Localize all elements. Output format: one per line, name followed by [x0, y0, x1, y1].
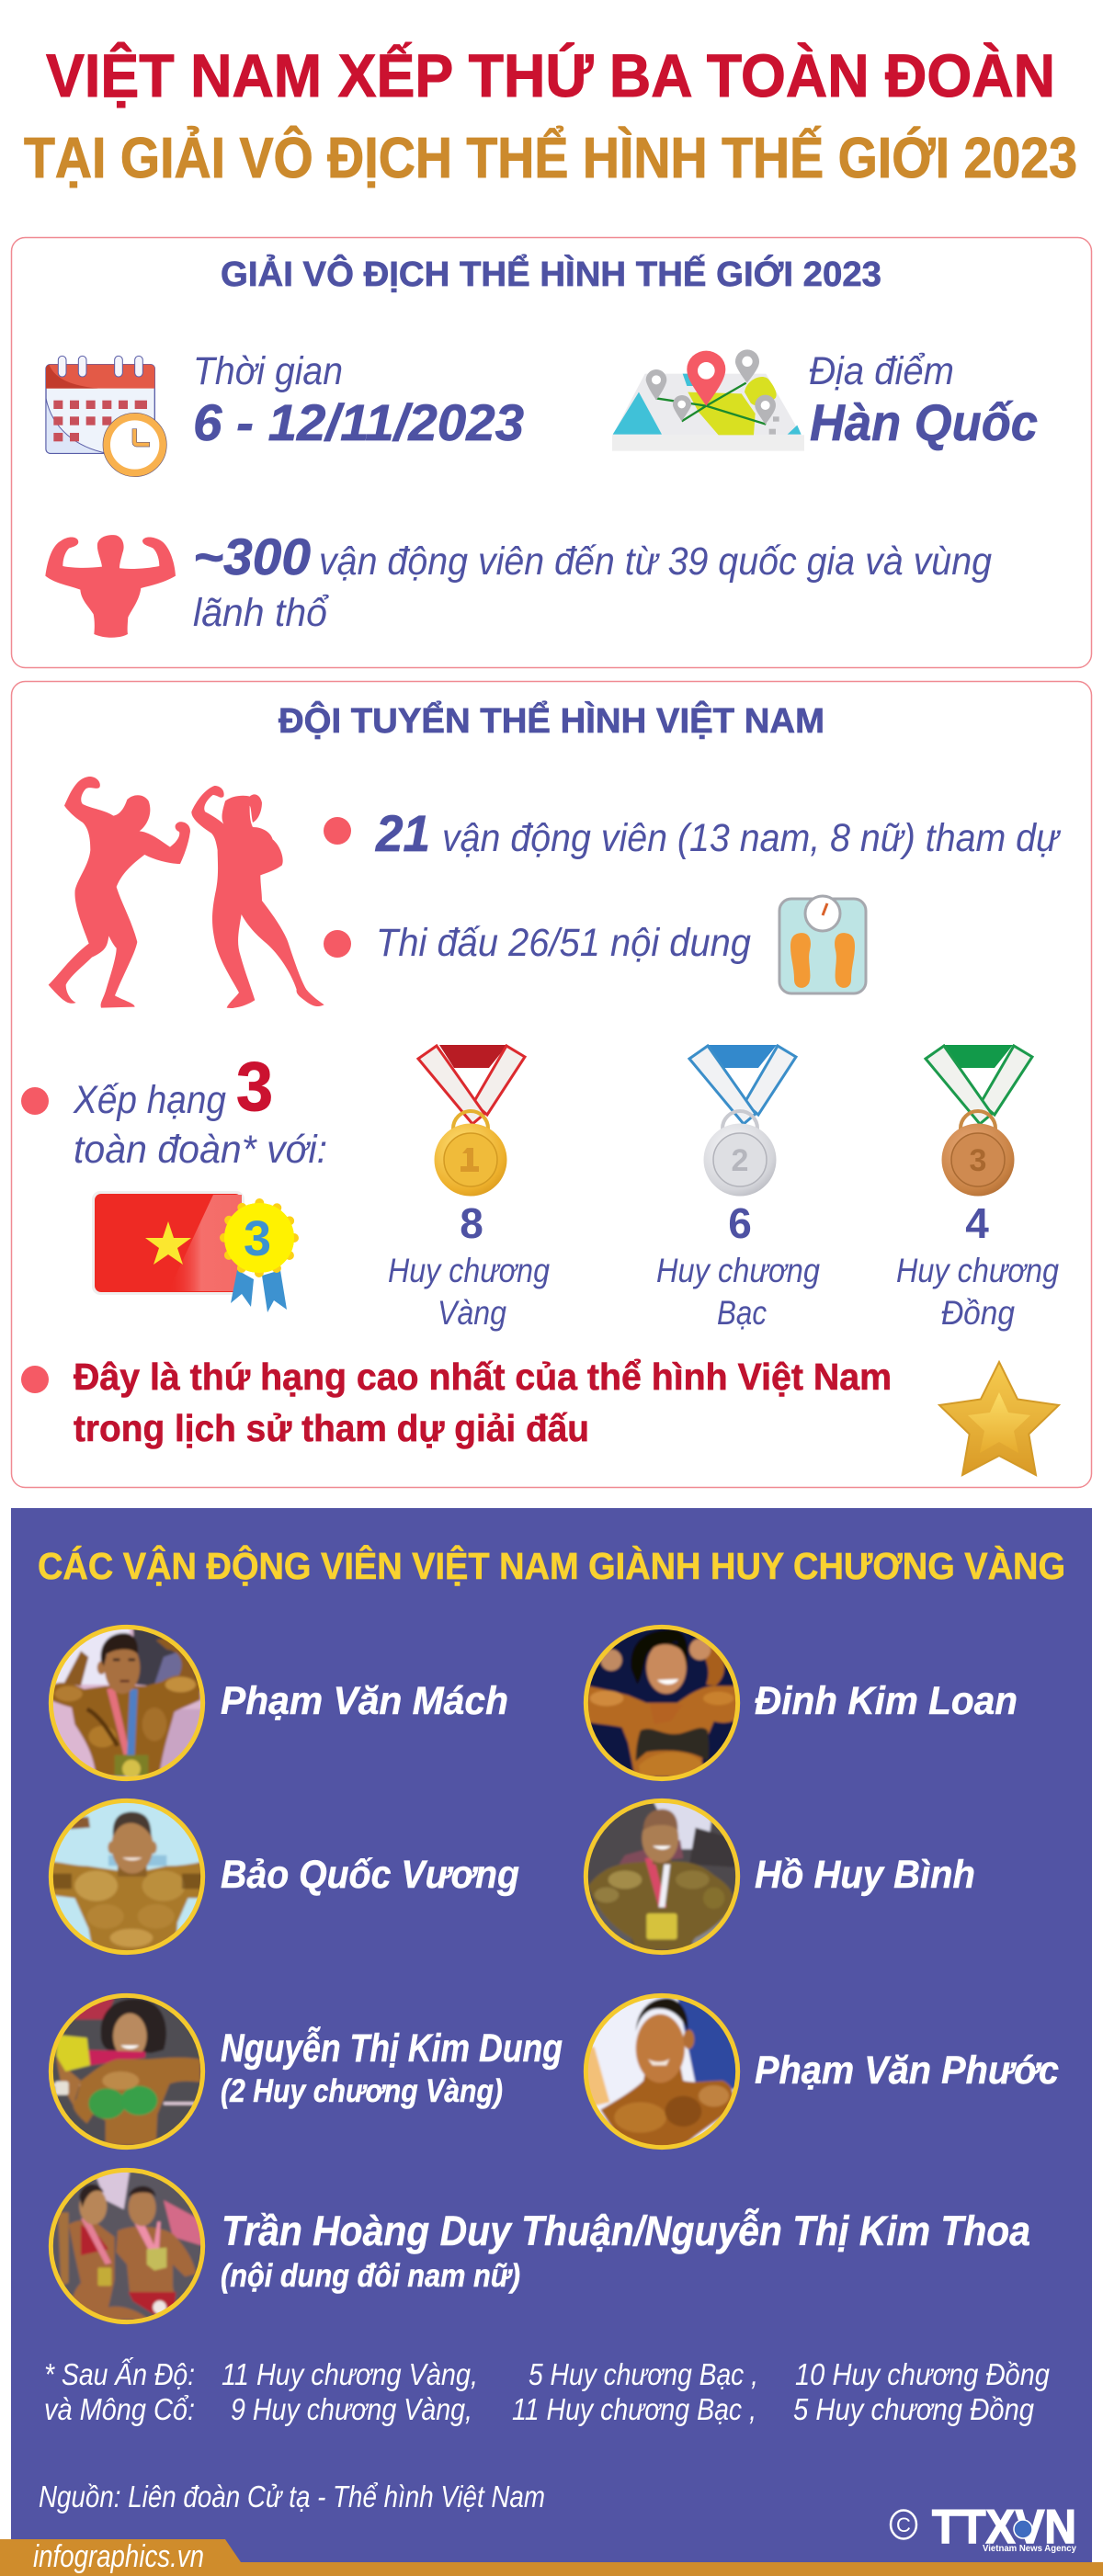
- name: pair event: Trần Hoàng Duy Thuận/Nguyễn Thị Kim Thoa: [222, 2207, 1030, 2254]
- bullet: overall rank 3: Xếp hạng: [73, 1078, 226, 1122]
- heading: team: ĐỘI TUYỂN THỂ HÌNH VIỆT NAM: [279, 699, 824, 741]
- silver medal: 2: [732, 1143, 748, 1178]
- text: time: 6 - 12/11/2023: [193, 393, 524, 451]
- icon: calendar and clock: [46, 356, 166, 477]
- logo: TTXVN: Vietnam News Agency: [983, 2543, 1076, 2554]
- silver medal: [656, 1045, 820, 1332]
- callout: highest ranking: [21, 1356, 892, 1449]
- name: pair event: [221, 2207, 1030, 2294]
- icon: male and female bodybuilder silhouettes: [49, 777, 324, 1008]
- label: silver: [656, 1252, 820, 1332]
- name: Nguyễn Thị Kim Dung: (2 Huy chương Vàng): [221, 2073, 503, 2109]
- icon: map with pins: [612, 349, 804, 451]
- label: silver: Bạc: [717, 1294, 767, 1332]
- callout: highest ranking: Đây là thứ hạng cao nhất của thể hình Việt Nam: [74, 1356, 892, 1398]
- heading: championship: GIẢI VÔ ĐỊCH THỂ HÌNH THẾ GIỚI 2023: [221, 253, 881, 294]
- text: venue: Địa điểm: [809, 349, 954, 393]
- footnote: India and Mongolia medals: [44, 2357, 1051, 2426]
- portrait: Hồ Huy Bình: [586, 1800, 738, 1953]
- name: Phạm Văn Phước: Phạm Văn Phước: [755, 2048, 1059, 2093]
- number: silver count: 6: [728, 1199, 752, 1247]
- icon: weighing scale: [779, 896, 866, 993]
- title: [24, 41, 1077, 190]
- footer band with site name: [0, 2539, 1103, 2576]
- portrait: Bảo Quốc Vương: [51, 1800, 203, 1953]
- source: Nguồn: Liên đoàn Cử tạ - Thể hình Việt Nam: [39, 2480, 545, 2514]
- text: athletes count: [193, 528, 992, 635]
- gold medal: [388, 1045, 550, 1332]
- label: silver: Huy chương: [656, 1252, 820, 1289]
- number: bronze count: 4: [965, 1199, 989, 1247]
- footnote: India and Mongolia medals: 9 Huy chương Vàng,: [231, 2392, 472, 2426]
- callout: highest ranking: trong lịch sử tham dự giải đấu: [74, 1407, 589, 1449]
- portrait: Phạm Văn Mách: [51, 1627, 203, 1779]
- icon: Vietnam flag with rank badge: [92, 1191, 294, 1312]
- bronze medal: [896, 1045, 1059, 1332]
- name: pair event: (nội dung đôi nam nữ): [221, 2258, 520, 2294]
- footnote: India and Mongolia medals: 11 Huy chương Bạc ,: [512, 2392, 756, 2426]
- name: Phạm Văn Mách: Phạm Văn Mách: [221, 1679, 508, 1723]
- footnote: India and Mongolia medals: và Mông Cổ:: [44, 2392, 195, 2426]
- bullet: 21 athletes: [324, 804, 1062, 862]
- bronze medal: 3: [970, 1143, 986, 1178]
- text: venue: Hàn Quốc: [810, 393, 1038, 451]
- label: gold: Huy chương: [388, 1252, 550, 1289]
- label: gold: Vàng: [438, 1294, 506, 1332]
- label: bronze: Huy chương: [896, 1252, 1059, 1289]
- text: venue: [809, 349, 1038, 451]
- name: Bảo Quốc Vương: Bảo Quốc Vương: [221, 1853, 519, 1897]
- footnote: India and Mongolia medals: 5 Huy chương Bạc ,: [529, 2357, 758, 2391]
- footnote: India and Mongolia medals: * Sau Ấn Độ:: [44, 2357, 195, 2391]
- icon: Vietnam flag with rank badge: 3: [244, 1211, 271, 1266]
- bullet: overall rank 3: [21, 1048, 327, 1172]
- label: bronze: [896, 1252, 1059, 1332]
- panel: Vietnam team: [11, 682, 1092, 1487]
- text: athletes count: lãnh thổ: [193, 591, 329, 635]
- text: time: Thời gian: [193, 349, 343, 393]
- bullet: 21 athletes: vận động viên (13 nam, 8 nữ) tham dự: [442, 816, 1062, 860]
- portrait: Đinh Kim Loan: [586, 1627, 738, 1779]
- bullet: 21 athletes: 21: [375, 804, 430, 862]
- footnote: India and Mongolia medals: 5 Huy chương Đồng: [793, 2392, 1035, 2426]
- panel: gold medal athletes: [11, 1508, 1092, 2562]
- label: gold: [388, 1252, 550, 1332]
- portrait: Phạm Văn Phước: [586, 1995, 738, 2148]
- logo: TTXVN: TTXVN: [932, 2501, 1076, 2554]
- footer band with site name: infographics.vn: [33, 2539, 204, 2574]
- portrait: Nguyễn Thị Kim Dung: [51, 1995, 203, 2148]
- name: Nguyễn Thị Kim Dung: Nguyễn Thị Kim Dung: [221, 2026, 563, 2071]
- footnote: India and Mongolia medals: 11 Huy chương Vàng,: [222, 2357, 478, 2391]
- title: VIỆT NAM XẾP THỨ BA TOÀN ĐOÀN: [46, 41, 1055, 109]
- icon: gold star: [939, 1362, 1059, 1475]
- text: athletes count: ~300: [193, 528, 311, 585]
- logo: TTXVN: C: [896, 2514, 911, 2536]
- bullet: overall rank 3: toàn đoàn* với:: [74, 1128, 327, 1172]
- portrait: Trần Hoàng Duy Thuận and Nguyễn Thị Kim Thoa: [51, 2170, 203, 2322]
- text: time: [193, 349, 524, 451]
- label: bronze: Đồng: [941, 1294, 1015, 1332]
- name: Nguyễn Thị Kim Dung: [221, 2026, 563, 2109]
- name: Hồ Huy Bình: Hồ Huy Bình: [755, 1853, 975, 1897]
- number: gold count: 8: [460, 1199, 483, 1247]
- icon: muscle torso: [45, 535, 176, 638]
- bullet: overall rank 3: 3: [236, 1048, 273, 1125]
- text: athletes count: vận động viên đến từ 39 quốc gia và vùng: [319, 539, 992, 584]
- footnote: India and Mongolia medals: 10 Huy chương Đồng: [795, 2357, 1051, 2391]
- bullet: events: Thi đấu 26/51 nội dung: [376, 921, 751, 965]
- name: Đinh Kim Loan: Đinh Kim Loan: [755, 1679, 1018, 1723]
- panel: championship info: [11, 237, 1092, 667]
